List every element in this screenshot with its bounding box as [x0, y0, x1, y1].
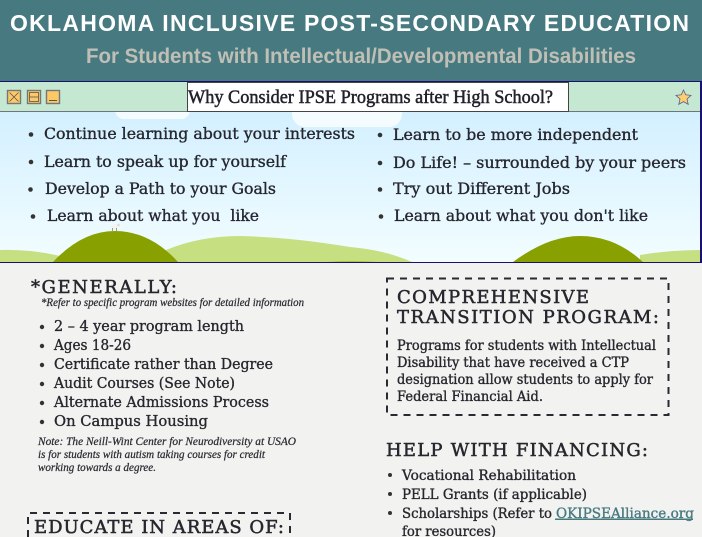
list: program traits: Alternate Admissions Process [53, 393, 269, 411]
list: program traits: Ages 18-26 [53, 336, 131, 354]
description: Disability that have received a CTP [397, 355, 629, 371]
list: financing options: Vocational Rehabilitation [401, 468, 576, 484]
icon: star [676, 90, 691, 104]
title bar [0, 82, 700, 112]
hills [0, 231, 700, 262]
list: financing options [388, 468, 694, 537]
list: right reasons [378, 125, 686, 225]
heading: comprehensive transition program: TRANSITION PROGRAM: [397, 307, 659, 328]
note: Neill-Wint Center: Note: The Neill-Wint Center for Neurodiversity at USAO [37, 434, 296, 448]
description: designation allow students to apply for [397, 372, 654, 388]
list: left reasons: Develop a Path to your Goals [45, 179, 276, 198]
refer note: *Refer to specific program websites for detailed information [41, 295, 304, 309]
list: program traits: 2 – 4 year program length [54, 317, 244, 335]
list: left reasons: Continue learning about your interests [44, 124, 355, 143]
title: OKLAHOMA INCLUSIVE POST-SECONDARY EDUCATION [10, 10, 689, 36]
list: right reasons: Learn about what you don't like [394, 206, 648, 225]
panel: help with financing [386, 440, 694, 537]
heading box: Why Consider IPSE Programs after High School? [188, 87, 553, 108]
icon: sheep on hill [112, 224, 120, 231]
list: program traits: Audit Courses (See Note) [53, 374, 235, 392]
icon: minimize button [46, 90, 60, 104]
list: right reasons: Learn to be more independent [393, 125, 639, 144]
note: Neill-Wint Center: is for students with autism taking courses for credit [38, 447, 266, 461]
panel: comprehensive transition program [387, 278, 668, 415]
list: program traits [40, 317, 273, 430]
list: financing options: Scholarships (Refer to [402, 506, 552, 522]
list: right reasons: Try out Different Jobs [393, 179, 570, 198]
list: program traits: On Campus Housing [54, 412, 208, 430]
subtitle: For Students with Intellectual/Developmental Disabilities [86, 45, 636, 68]
clouds [115, 100, 402, 127]
list: right reasons: Do Life! – surrounded by your peers [393, 153, 686, 172]
note: Neill-Wint Center: working towards a degree. [38, 460, 156, 474]
heading: generally: *GENERALLY: [31, 277, 177, 298]
description [397, 338, 656, 405]
panel: why consider IPSE programs [0, 81, 702, 263]
heading: comprehensive transition program [397, 287, 659, 328]
heading: help with financing: HELP WITH FINANCING: [386, 440, 648, 461]
list: financing options: PELL Grants (if applicable) [402, 487, 587, 503]
list: left reasons: Learn to speak up for yourself [44, 152, 287, 171]
heading: comprehensive transition program: COMPREHENSIVE [397, 287, 589, 308]
sky background [0, 82, 700, 262]
list: program traits: Certificate rather than Degree [54, 355, 273, 373]
note: Neill-Wint Center [37, 434, 296, 474]
description: Programs for students with Intellectual [397, 338, 656, 354]
icon: maximize button [28, 90, 40, 104]
header banner [0, 0, 702, 81]
list: left reasons [28, 124, 355, 225]
link: OKIPSEAlliance.org [556, 506, 694, 522]
description: Federal Financial Aid. [397, 389, 543, 405]
list: left reasons: Learn about what you like [47, 206, 259, 225]
panel: generally [31, 277, 304, 474]
icon: close button [8, 90, 20, 104]
